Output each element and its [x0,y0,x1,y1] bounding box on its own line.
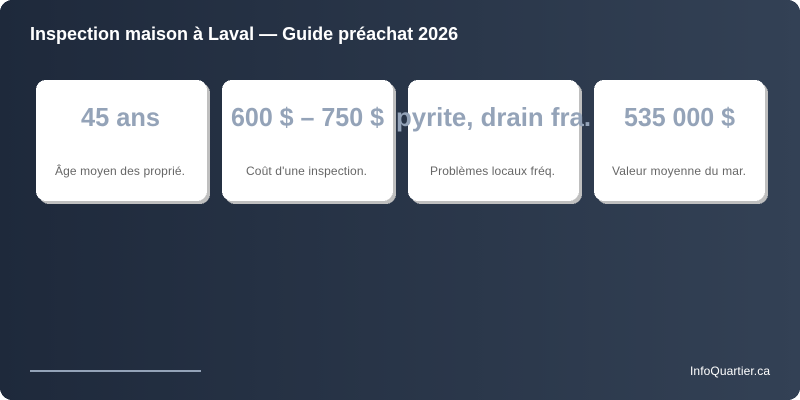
card: local problems [396,80,591,204]
card: market value: 535 000 $ [624,102,736,132]
card: local problems: pyrite, drain fra. [396,102,591,132]
card: cost [222,80,396,204]
footer line [30,370,201,372]
card: market value: Valeur moyenne du mar. [612,164,746,178]
title: Inspection maison à Laval — Guide préachat 2026 [30,24,458,44]
footer brand: InfoQuartier.ca [690,364,770,378]
card: cost: Coût d'une inspection. [246,164,367,178]
card: age: 45 ans [81,102,160,132]
card: cost: 600 $ – 750 $ [231,102,385,132]
card: local problems: Problèmes locaux fréq. [430,164,555,178]
card: market value [594,80,768,204]
card: age [36,80,210,204]
card: age: Âge moyen des proprié. [55,163,185,178]
